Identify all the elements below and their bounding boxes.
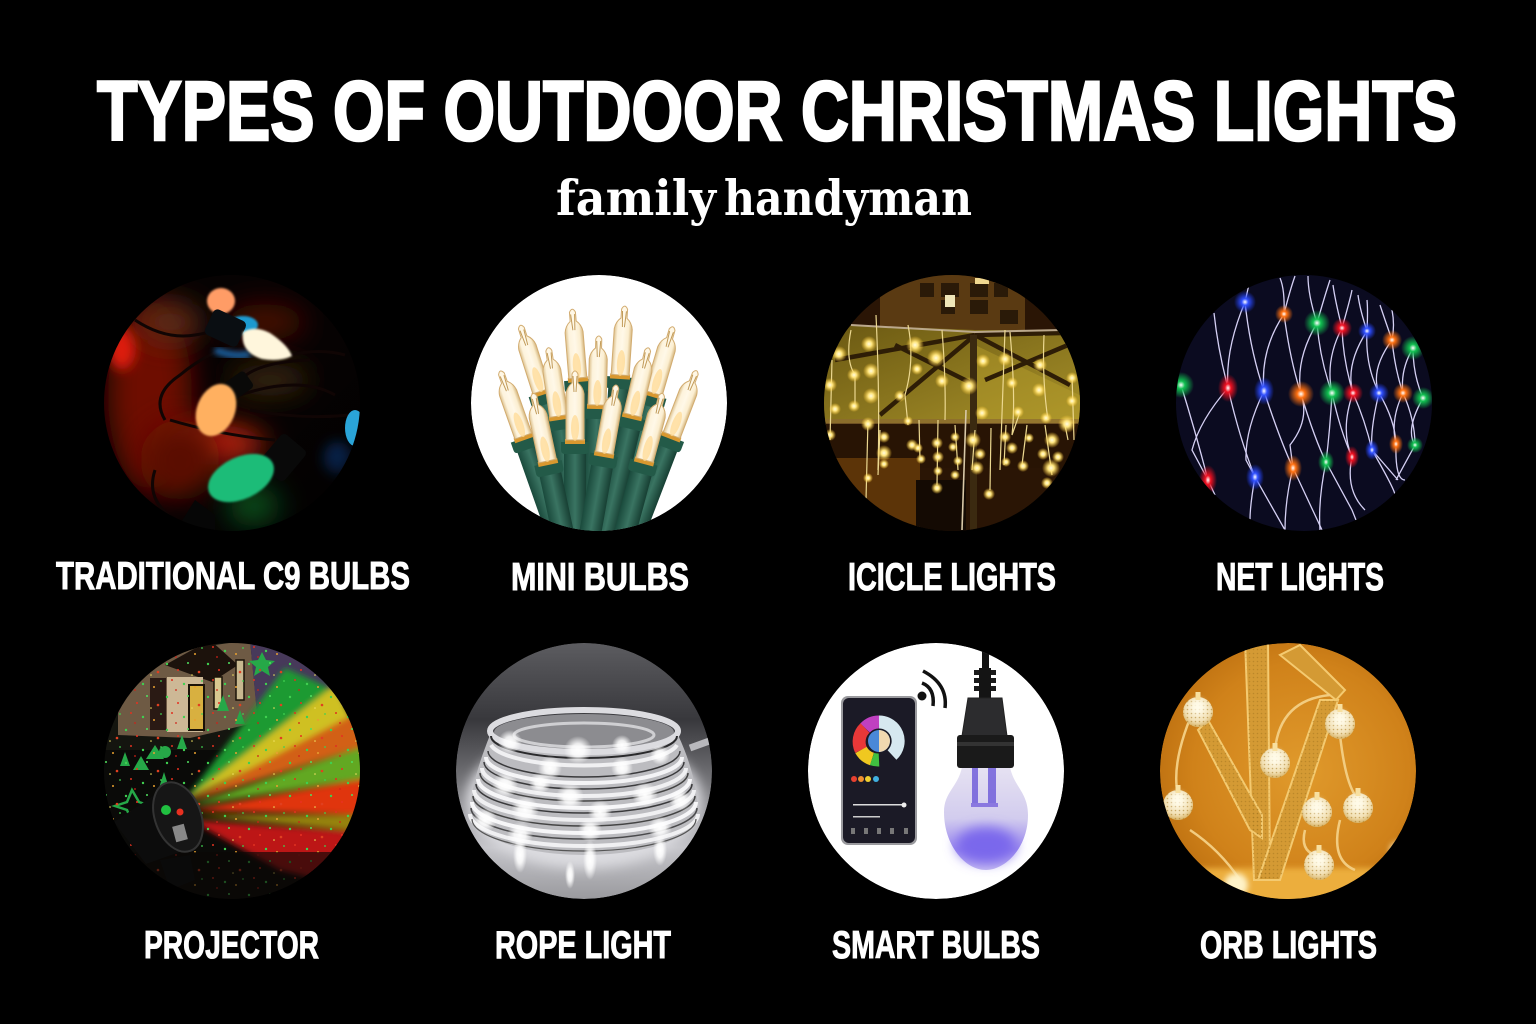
projector body xyxy=(124,781,204,884)
panel: smart bulbs photo xyxy=(808,643,1064,899)
umbrella ribs xyxy=(835,333,1070,415)
rope LED glows xyxy=(473,730,691,889)
brand logo: handyman xyxy=(724,169,972,227)
white bulb xyxy=(243,329,292,360)
coil body xyxy=(470,735,698,855)
panel: mini bulbs photo xyxy=(471,275,727,531)
peach bulb top xyxy=(207,288,235,314)
colour wheel xyxy=(859,722,898,760)
label: traditional C9 bulbs: TRADITIONAL C9 BULBS xyxy=(56,555,410,598)
green socket xyxy=(264,438,280,462)
laser rays xyxy=(185,668,368,880)
woven branches xyxy=(1198,640,1345,880)
panel: icicle lights photo xyxy=(824,275,1080,531)
label: orb lights: ORB LIGHTS xyxy=(1200,924,1377,967)
umbrella canopy xyxy=(820,325,1090,426)
net light nodes xyxy=(1168,291,1434,495)
brand logo xyxy=(556,169,972,227)
label: icicle lights: ICICLE LIGHTS xyxy=(848,556,1056,599)
orb bulbs xyxy=(1183,692,1213,727)
blue bulb xyxy=(228,316,258,334)
star and tree projections xyxy=(115,652,275,822)
brand logo: family xyxy=(556,169,717,227)
projected speckle xyxy=(100,640,365,905)
panel: traditional C9 bulbs photo xyxy=(104,280,360,531)
net wires xyxy=(1181,276,1423,530)
lit windows xyxy=(189,685,204,730)
panel: orb lights photo xyxy=(1160,640,1420,908)
rope coils xyxy=(470,710,698,851)
label: mini bulbs: MINI BULBS xyxy=(511,556,689,599)
label: smart bulbs: SMART BULBS xyxy=(832,924,1040,967)
green bulb xyxy=(206,452,276,504)
panel: projector photo xyxy=(100,640,368,907)
socket xyxy=(205,309,246,346)
panel: net lights photo xyxy=(1176,275,1432,531)
panel: rope light photo xyxy=(456,643,712,899)
label: rope light: ROPE LIGHT xyxy=(495,924,671,967)
icicle strands xyxy=(830,315,1074,500)
socket xyxy=(230,372,253,397)
building behind xyxy=(880,275,1025,330)
house facade xyxy=(118,640,258,738)
lower wall xyxy=(820,423,1085,468)
string wire xyxy=(1176,695,1355,880)
label: projector: PROJECTOR xyxy=(144,924,319,967)
blue right bulb xyxy=(345,410,360,446)
wifi icon xyxy=(918,671,945,708)
bulb wires xyxy=(135,320,350,520)
smart bulb xyxy=(944,648,1028,870)
orange bulb xyxy=(194,382,238,438)
icicle light dots xyxy=(823,336,1078,500)
phone xyxy=(841,696,917,845)
colour dots xyxy=(851,776,857,782)
label: net lights: NET LIGHTS xyxy=(1216,556,1384,599)
